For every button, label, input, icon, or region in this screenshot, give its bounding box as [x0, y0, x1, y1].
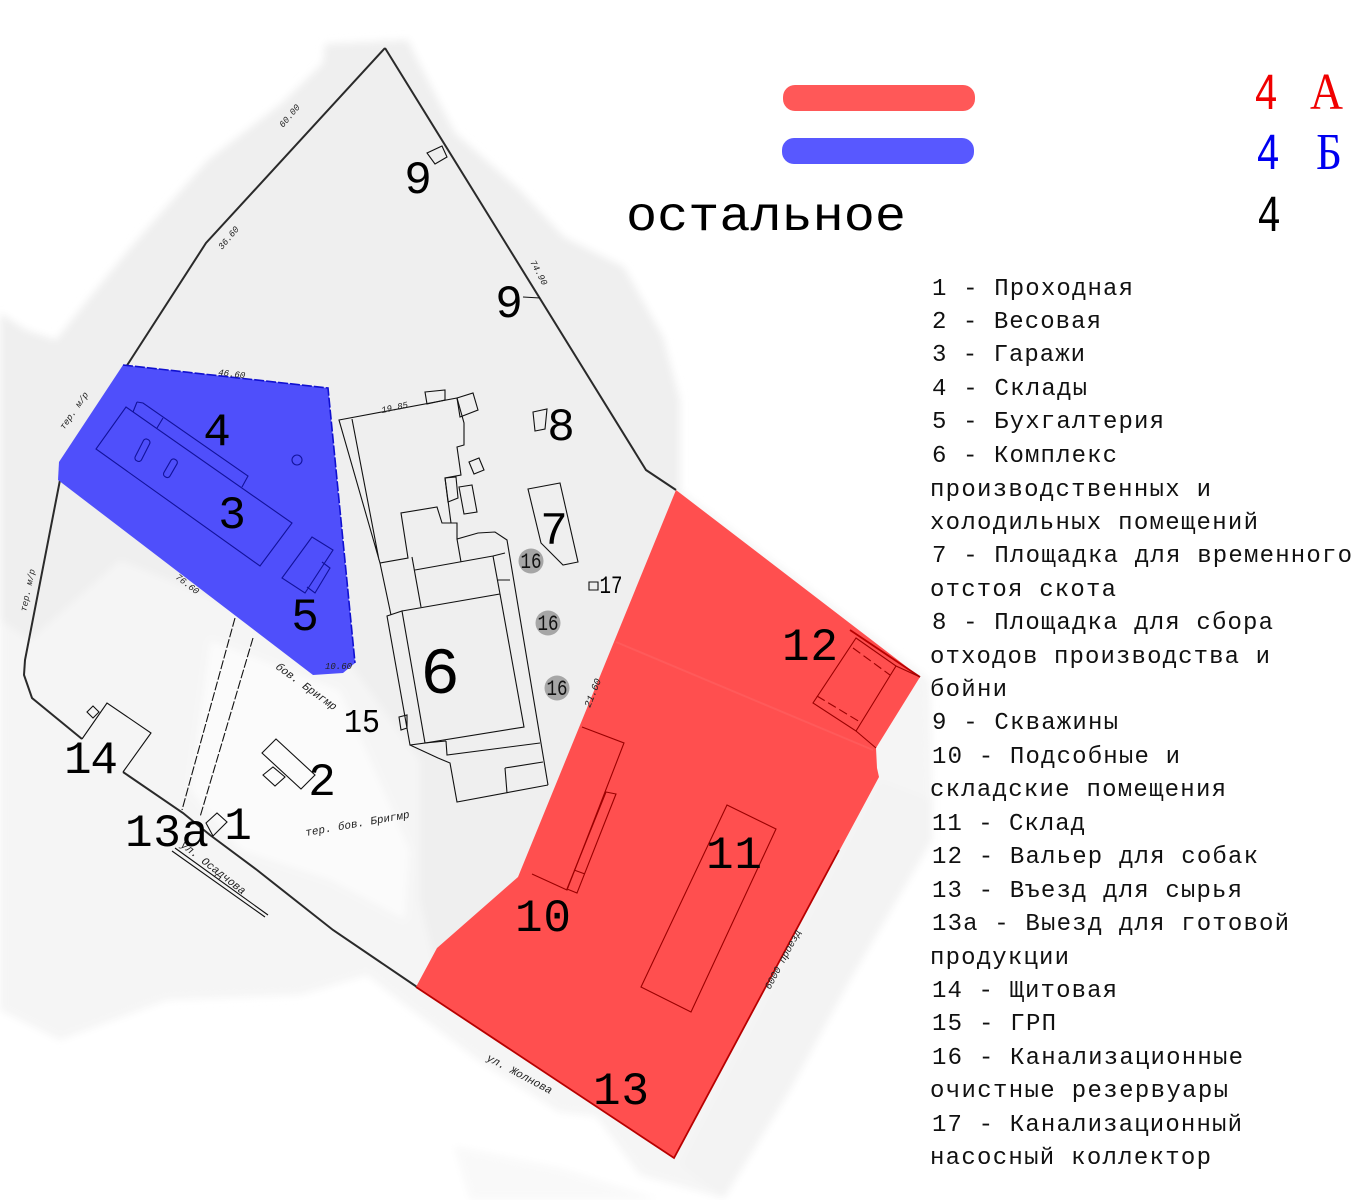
- map numbers: [64, 155, 838, 1118]
- key list: отходов производства и: [930, 644, 1270, 671]
- legend codes: А: [1310, 64, 1343, 121]
- building 8: [533, 409, 547, 431]
- markers 16: 16: [520, 550, 542, 575]
- legend codes: Б: [1316, 124, 1342, 181]
- building 14: [82, 703, 151, 772]
- map numbers: 13а: [125, 808, 209, 860]
- key list: 1 - Проходная: [932, 276, 1133, 303]
- map numbers: 6: [420, 638, 460, 713]
- key list: 10 - Подсобные и: [932, 744, 1180, 771]
- legend codes: 4: [1254, 66, 1278, 125]
- plan linework: [24, 48, 676, 987]
- markers 16: 16: [546, 677, 568, 702]
- markers 16: [518, 548, 570, 702]
- key list: 4 - Склады: [932, 376, 1087, 403]
- key list: 3 - Гаражи: [932, 342, 1085, 369]
- key list: 15 - ГРП: [932, 1011, 1056, 1038]
- survey annotations: тер. м/р: [19, 568, 38, 613]
- boxes 17 and 9: [427, 146, 598, 590]
- key list: [930, 276, 1352, 1172]
- survey annotations: бов. Бригмр: [273, 661, 339, 714]
- key list: производственных и: [930, 477, 1211, 504]
- map numbers: 4: [203, 407, 231, 459]
- survey annotations: 10.60: [325, 662, 353, 672]
- key list: 9 - Скважины: [932, 710, 1118, 737]
- entrance road: [182, 618, 253, 817]
- map numbers: 7: [540, 506, 568, 558]
- street double line: [172, 848, 268, 917]
- survey annotations: 60.00: [278, 102, 303, 130]
- blue zone edges: [123, 365, 355, 663]
- annexes: [399, 390, 484, 730]
- survey annotations: 19.85: [381, 400, 410, 416]
- key list: 5 - Бухгалтерия: [932, 409, 1164, 436]
- key list: бойни: [930, 677, 1007, 704]
- key list: 14 - Щитовая: [932, 978, 1117, 1005]
- key list: 16 - Канализационные: [932, 1045, 1243, 1072]
- map numbers: 13: [593, 1066, 649, 1118]
- key list: 7 - Площадка для временного: [932, 543, 1352, 570]
- key list: 13 - Въезд для сырья: [932, 878, 1242, 905]
- legend codes: [1254, 64, 1343, 247]
- red zone buildings: [532, 638, 920, 1012]
- survey annotations: 46.60: [218, 368, 246, 381]
- map numbers: 12: [782, 622, 838, 674]
- legend colour bars: [782, 85, 975, 164]
- survey annotations: 21.60: [584, 678, 605, 709]
- survey annotations: ул. Осадчова: [177, 839, 247, 898]
- legend codes: 4: [1257, 188, 1281, 247]
- key list: 17 - Канализационный: [932, 1112, 1242, 1139]
- complex 6 outer: [339, 398, 464, 563]
- key list: 13а - Выезд для готовой: [932, 911, 1289, 938]
- survey annotations: тер. бов. Бригмр: [304, 809, 411, 840]
- site boundary: [24, 48, 676, 987]
- survey annotations: 6000 проезд: [764, 928, 805, 992]
- key list: складские помещения: [930, 777, 1226, 804]
- map numbers: 3: [218, 490, 246, 542]
- building 1: [206, 813, 227, 836]
- survey annotations: 76.60: [173, 572, 201, 597]
- map numbers: 2: [308, 757, 336, 809]
- blue zone buildings: [96, 402, 333, 593]
- key list: насосный коллектор: [930, 1145, 1211, 1172]
- key list: отстоя скота: [930, 577, 1116, 604]
- map numbers: 9: [495, 279, 523, 331]
- survey annotations: [19, 102, 805, 1098]
- legend label: other: остальное: [626, 191, 906, 245]
- map numbers: 1: [224, 801, 252, 853]
- red edges: [416, 630, 920, 1158]
- key list: 8 - Площадка для сбора: [932, 610, 1273, 637]
- red zone 4A: [416, 490, 920, 1158]
- legend codes: 4: [1256, 126, 1280, 185]
- markers 16: 16: [538, 612, 558, 637]
- key list: 2 - Весовая: [932, 309, 1101, 336]
- survey annotations: тер. м/р: [58, 391, 91, 432]
- key list: 11 - Склад: [932, 811, 1085, 838]
- map numbers: 11: [706, 830, 762, 882]
- key list: холодильных помещений: [930, 510, 1258, 537]
- complex 6 main hall: [387, 556, 524, 745]
- key list: продукции: [930, 945, 1069, 972]
- complex 6 south: [410, 741, 548, 802]
- survey annotations: ул. Жолнова: [483, 1052, 554, 1098]
- key list: 6 - Комплекс: [932, 443, 1117, 470]
- map numbers: 9: [404, 155, 432, 207]
- blue zone 4B: [58, 365, 355, 675]
- survey annotations: 74.90: [527, 259, 549, 288]
- key list: очистные резервуары: [930, 1078, 1228, 1105]
- map numbers: 14: [64, 735, 118, 787]
- key list: 12 - Вальер для собак: [932, 844, 1258, 871]
- map numbers: 5: [291, 592, 319, 644]
- scanned paper background: [0, 40, 932, 1200]
- map numbers: 15: [344, 705, 380, 742]
- survey annotations: 36.60: [217, 224, 242, 252]
- map numbers: 10: [515, 893, 571, 945]
- building 2: [262, 739, 315, 789]
- building 7: [528, 483, 578, 565]
- map numbers: 17: [600, 572, 622, 601]
- fold line: [616, 642, 873, 750]
- complex 6 middle: [380, 523, 548, 785]
- map numbers: 8: [547, 402, 575, 454]
